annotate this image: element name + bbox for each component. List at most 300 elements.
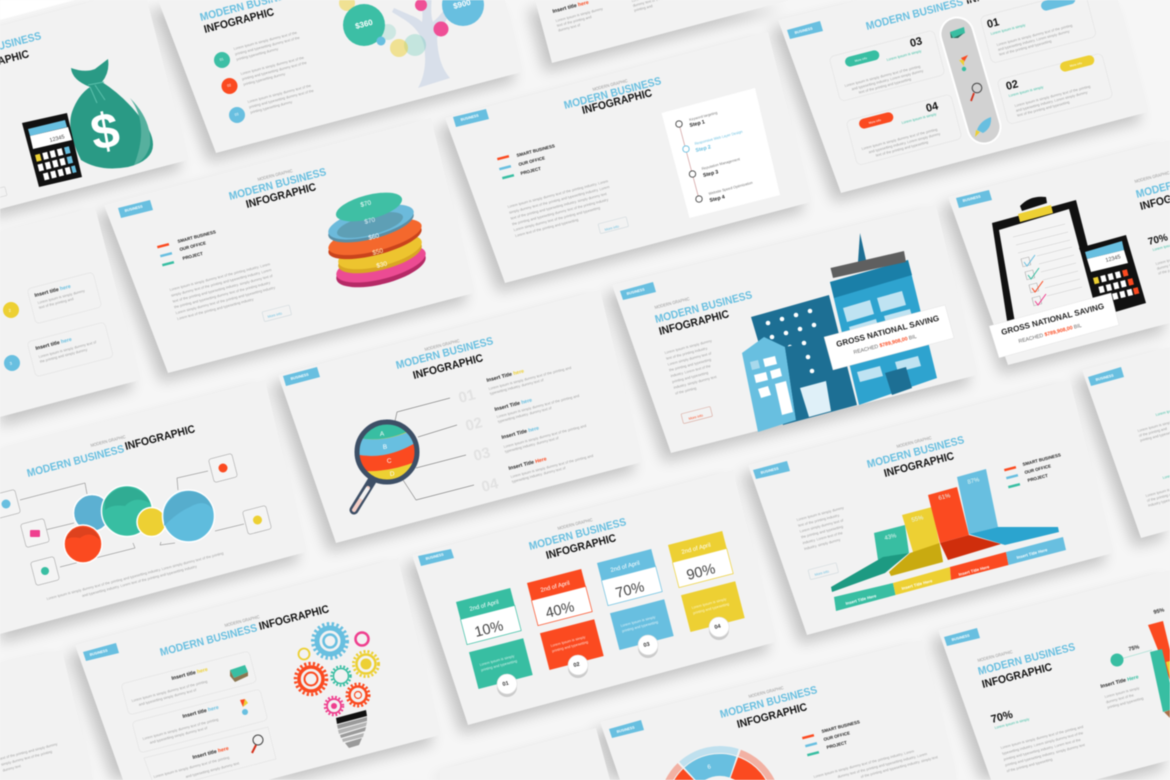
stat: 70%: Lorem Ipsum is simply <box>994 717 1030 730</box>
title: percent cards slide: MODERN GRAPHIC <box>557 517 593 531</box>
text: 70% <box>1147 232 1170 276</box>
card: steps: Keyword targeting <box>689 111 718 122</box>
paragraph: Lorem Ipsum is simply dummy text of the printing and <box>1000 725 1084 750</box>
numbers: 03 <box>472 444 492 465</box>
panel: money tree slide <box>158 0 522 153</box>
paragraph: Lorem Ipsum is simply dummy text of the printing and typesetting industry. Lorem simply dummy text of the printing <box>46 551 224 601</box>
card 04: 04 <box>925 100 940 115</box>
panel: bubbles slide <box>0 380 306 634</box>
list text: Lorem Ipsum is simply dummy text of the printing and <box>488 366 572 391</box>
list text: Insert Title here <box>486 368 525 384</box>
card 03 <box>829 30 945 102</box>
legend <box>497 143 555 179</box>
paragraph: the printing and typesetting <box>801 525 844 539</box>
chart: stacked discs: $70 <box>360 199 372 209</box>
button <box>681 406 713 424</box>
paragraph: of the printing <box>675 386 697 396</box>
icon: magnifier: C <box>387 458 392 465</box>
card: 40%: 02 <box>573 662 580 669</box>
list: numbered items: printing typesetting dummy <box>250 100 293 115</box>
panel: top middle slide <box>535 0 790 63</box>
title: gears slide: MODERN GRAPHIC <box>224 614 260 628</box>
legend: OUR OFFICE <box>823 730 851 742</box>
badge: BUSINESS <box>951 633 971 642</box>
stat: 70% <box>990 709 1030 730</box>
title: percent cards slide: MODERN BUSINESS <box>528 516 628 553</box>
card: 10% <box>456 588 533 697</box>
row: bulb: Insert title here <box>182 705 220 720</box>
badge: BUSINESS <box>1095 373 1115 382</box>
title: pill slide <box>865 0 1038 33</box>
callout: gross national saving: REACHED $789,908,00 BIL <box>853 334 917 356</box>
badge: BUSINESS <box>962 194 982 203</box>
card: steps: Reputation Management <box>701 157 740 171</box>
badge <box>944 628 980 646</box>
icon: money bag <box>70 59 153 168</box>
card 04: Lorem Ipsum is simply dummy text of the printing <box>861 128 938 151</box>
list: numbered items: Lorem Ipsum is simply dummy text of the <box>240 56 304 76</box>
title: ring chart slide: INFOGRAPHIC <box>736 701 809 731</box>
panel: ring chart slide <box>600 640 957 780</box>
card: 40%: 2nd of April <box>540 581 571 594</box>
icon: calculator <box>22 113 82 187</box>
card 01: Lorem Ipsum is simply dummy text of the printing <box>996 24 1073 47</box>
card: 90%: 2nd of April <box>681 543 712 556</box>
callout: gross national saving <box>989 293 1119 358</box>
paragraph: text of the printing industry. <box>798 513 840 528</box>
card 04: text of the printing and typesetting <box>875 140 929 158</box>
list text: typesetting industry. dummy text of <box>512 466 566 484</box>
title: bubbles slide: MODERN GRAPHIC <box>90 434 126 448</box>
badge: BUSINESS <box>124 204 144 213</box>
card 03: More info <box>854 56 868 63</box>
title: bubbles slide <box>26 423 197 480</box>
badge <box>418 549 454 566</box>
paragraph: Lorem simply dummy text of <box>799 518 844 534</box>
title: bubbles slide: MODERN BUSINESS <box>26 443 126 480</box>
icon: calculator <box>1079 235 1146 315</box>
legend: SMART BUSINESS <box>177 229 216 244</box>
numbers: 01 <box>457 386 477 407</box>
row: bulb <box>132 689 268 753</box>
paragraph: typesetting industry. Lorem simply dummy text of the <box>1002 731 1084 756</box>
panel: gears slide <box>75 558 440 780</box>
text blocks: of the printing and <box>1139 427 1167 438</box>
card: 90% <box>668 531 745 640</box>
badge <box>753 461 790 479</box>
card 01: Lorem Ipsum is simply <box>990 23 1026 36</box>
button <box>262 305 292 322</box>
card: 70%: Lorem Ipsum is simply <box>620 615 656 628</box>
paragraph: Lorem simply dummy text of the printing and typesetting industry <box>175 286 276 315</box>
card 02: and typesetting industry. Lorem simply dummy <box>1016 90 1088 113</box>
numbers <box>457 386 501 496</box>
title: gears slide: INFOGRAPHIC <box>258 603 331 633</box>
item box 2: text of the printing and <box>39 297 74 310</box>
card: 40% <box>527 569 604 678</box>
paragraph: and typesetting industry. Lorem text of the printing and typesetting industry <box>82 564 197 598</box>
callout: gross national saving: GROSS NATIONAL SAVING <box>1000 302 1105 337</box>
paragraph: printing and typesetting <box>672 371 709 384</box>
icons <box>2 464 262 575</box>
paragraph: Lorem Ipsum is simply dummy text of the printing industry. Lorem <box>813 749 915 779</box>
title: gears slide: MODERN BUSINESS <box>159 622 259 659</box>
text blocks <box>1137 408 1170 508</box>
chart: stepped bars: 43% <box>884 533 898 542</box>
callout: gross national saving: GROSS NATIONAL SAVING <box>835 314 940 349</box>
paragraph: Lorem Ipsum is simply dummy text of the printing industry. Lorem <box>507 179 609 209</box>
list: numbered items <box>214 30 316 123</box>
icon: tree: $360 <box>354 18 374 31</box>
row: magnifier: and typesetting simply dummy text <box>185 761 240 779</box>
legend: PROJECT <box>182 251 204 261</box>
card 01: and typesetting industry. Lorem simply dummy <box>998 29 1070 52</box>
stat: 70%: 70% <box>990 709 1014 726</box>
row: bulb: Lorem Ipsum is simply dummy text of the printing <box>142 718 219 741</box>
paragraph: Lorem simply dummy text of the printing and typesetting <box>513 206 601 232</box>
list: numbered items: printing and typesetting dummy text of the <box>242 61 307 81</box>
title: steps slide: MODERN GRAPHIC <box>592 78 628 92</box>
list text: Lorem Ipsum is simply dummy text of the printing and <box>503 424 587 449</box>
panel: right partial slide <box>1082 347 1170 538</box>
badge <box>83 643 119 661</box>
chart: partial bars <box>1110 607 1170 718</box>
chart: partial bars: 75% <box>1128 644 1140 653</box>
capsule with icons <box>950 27 991 137</box>
title: building slide <box>654 289 754 338</box>
panel: money bag slide <box>0 0 188 209</box>
panel: stepped bars slide <box>748 380 1113 635</box>
card 02: Lorem Ipsum is simply dummy text of the printing <box>1014 85 1091 108</box>
card 03: Lorem Ipsum is simply dummy text of the printing <box>844 65 921 88</box>
title: ring chart slide: MODERN BUSINESS <box>719 684 819 721</box>
card: steps: Step 3 <box>702 169 719 179</box>
numbers: 04 <box>480 475 501 496</box>
card 01: 01 <box>986 16 1001 31</box>
badge <box>1088 367 1124 386</box>
card 03: and typesetting industry. Lorem simply dummy <box>851 69 924 91</box>
panel: left partial slide <box>0 207 140 417</box>
paragraph: Lorem Ipsum is simply dummy text of the printing industry. Lorem <box>169 262 271 292</box>
badge <box>609 720 644 738</box>
list text: typesetting industry. dummy text of <box>498 406 552 424</box>
card: 70% <box>597 549 674 658</box>
card: steps <box>662 88 780 218</box>
icon: clipboard <box>992 197 1108 340</box>
card: 40%: Lorem Ipsum is simply <box>550 635 586 648</box>
title: stacked discs slide: MODERN GRAPHIC <box>257 168 293 182</box>
item box 3: Lorem Ipsum is simply dummy text of <box>38 340 97 359</box>
legend: SMART BUSINESS <box>1022 452 1061 467</box>
row: magnifier <box>144 727 276 780</box>
title: gears slide <box>159 603 331 659</box>
numbers: 02 <box>464 414 484 435</box>
icon: money bag: $ <box>86 101 124 161</box>
chart: partial bars: 95% <box>1153 607 1165 616</box>
list: numbered items: printing typesetting dummy <box>236 47 279 62</box>
paragraph: the printing and typesetting <box>669 358 712 372</box>
panel: building slide <box>612 205 977 453</box>
text block: insert title: Insert Title Here <box>1100 674 1139 690</box>
paragraph: the printing and typesetting dummy text of the printing industry <box>512 198 609 226</box>
row: magnifier: Insert title here <box>192 746 230 761</box>
card: steps: Responsive Web Layer Design <box>694 130 743 146</box>
item box 2: 2 <box>8 307 12 313</box>
card: 70%: 03 <box>643 642 650 649</box>
paragraph: Lorem simply dummy text of <box>667 351 712 367</box>
card: steps: Step 4 <box>709 194 726 204</box>
title: magnifier slide: INFOGRAPHIC <box>412 352 485 382</box>
illustration: buildings <box>742 233 937 432</box>
chart: ring <box>665 746 775 780</box>
icon: calculator: 12345 <box>49 134 65 144</box>
title: magnifier slide: MODERN BUSINESS <box>395 335 495 372</box>
title: money tree slide: INFOGRAPHIC <box>203 6 276 36</box>
paragraph: Lorem Ipsum is simply dummy <box>796 506 844 522</box>
legend: OUR OFFICE <box>518 155 546 167</box>
title: steps slide: MODERN BUSINESS <box>563 75 663 112</box>
title: stacked discs slide: INFOGRAPHIC <box>245 181 318 211</box>
card 02: More info <box>1069 61 1083 68</box>
paragraph: industry. Lorem text of the <box>670 364 711 378</box>
list text: Insert Title Here <box>508 456 547 472</box>
legend: OUR OFFICE <box>179 240 207 252</box>
legend: PROJECT <box>826 740 848 750</box>
item box 3 <box>4 322 113 377</box>
row: magnifier: Lorem Ipsum is simply dummy text of the printing <box>153 756 230 779</box>
legend: SMART BUSINESS <box>516 143 555 158</box>
list: numbered items: 01 <box>219 57 224 62</box>
paragraph: text of the printing industry. <box>666 346 708 361</box>
button: More info <box>814 569 829 577</box>
panel: magnifier slide <box>278 290 642 543</box>
badge: BUSINESS <box>425 552 445 561</box>
card: 90%: 90% <box>685 561 717 584</box>
paragraph: printing and typesetting industry. Lorem text of the <box>1003 738 1081 762</box>
card 04: More info <box>868 118 882 125</box>
title: bar chart slide: MODERN GRAPHIC <box>977 649 1013 663</box>
card: 10%: 2nd of April <box>469 600 500 613</box>
paragraph: dummy text of the printing and typesetting industry. Lorem <box>837 752 928 779</box>
card 03: text of the printing and typesetting <box>858 77 912 95</box>
paragraph: industry. simply dummy text <box>673 375 717 390</box>
title: bar chart slide <box>977 641 1077 691</box>
text block: insert title: dummy text of <box>558 23 581 33</box>
title: bar chart slide: INFOGRAPHIC <box>981 661 1054 691</box>
callout: gross national saving <box>824 305 954 370</box>
text block: insert title: Insert title here <box>552 0 590 15</box>
title: bubbles slide: INFOGRAPHIC <box>124 423 197 453</box>
list: numbered items: Lorem Ipsum is simply dummy text of the <box>233 31 297 51</box>
button <box>0 187 7 199</box>
chart: stepped bars: Insert Title Here <box>1016 547 1048 560</box>
card 04 <box>846 94 962 166</box>
paragraph: simply dummy text of the printing <box>1 750 53 767</box>
paragraph: text of the printing and typesetting industry. simply dummy text of <box>172 274 273 304</box>
icon: calculator: 12345 <box>1105 254 1121 264</box>
list: numbered items: printing typesetting dummy <box>243 72 286 87</box>
paragraph: simply dummy text of the printing and typesetting industry. Lorem <box>171 268 272 298</box>
chart: stepped bars: Insert Title Here <box>845 593 877 606</box>
button: More info <box>604 224 619 232</box>
chart: stepped bars: Insert Title Here <box>901 578 933 591</box>
card 02: Lorem Ipsum is simply <box>1008 85 1044 98</box>
list text: Lorem Ipsum is simply dummy text of the printing and <box>496 394 580 419</box>
leader lines <box>395 398 474 500</box>
card 02 <box>997 53 1113 125</box>
panel: percent cards slide <box>412 470 776 725</box>
card: 90%: Lorem Ipsum is simply <box>691 597 727 610</box>
list text: Insert Title here <box>494 397 533 413</box>
card 04: and typesetting industry. Lorem simply dummy <box>868 132 941 154</box>
button <box>808 563 839 580</box>
title: stepped bars slide: MODERN GRAPHIC <box>896 435 932 449</box>
panel: pill slide <box>778 0 1148 193</box>
item box 3: Insert title here <box>35 337 73 352</box>
chart: stepped bars: 87% <box>967 477 981 486</box>
badge <box>787 21 823 39</box>
list text: Lorem Ipsum is simply dummy text of the printing and <box>510 454 594 479</box>
list: numbered items: 02 <box>227 83 232 88</box>
card 04: Lorem Ipsum is simply <box>901 112 937 125</box>
title: money tree slide <box>199 0 299 36</box>
card 03: Lorem Ipsum is simply <box>886 49 922 62</box>
legend <box>1004 452 1061 488</box>
card 02: text of the printing and typesetting <box>1017 100 1070 118</box>
row: book: and typesetting simply dummy text of <box>138 688 197 707</box>
chart: stepped bars: Insert Title Here <box>958 564 990 577</box>
title: building slide: MODERN GRAPHIC <box>654 296 690 310</box>
paragraph: Lorem Ipsum is simply dummy <box>664 339 712 355</box>
badge: BUSINESS <box>794 26 814 35</box>
paragraph: text of the printing and typesetting industry. simply dummy text <box>510 192 607 221</box>
badge: BUSINESS <box>760 466 780 475</box>
card: 90%: 04 <box>714 623 722 631</box>
button <box>598 217 629 234</box>
title: stacked discs slide: MODERN BUSINESS <box>228 166 328 203</box>
button: More info <box>688 413 703 421</box>
text block: insert title: printing and <box>634 4 653 13</box>
card: 40%: 40% <box>544 599 576 622</box>
list: numbered items: 03 <box>234 112 239 117</box>
title: stepped bars slide: INFOGRAPHIC <box>883 450 956 480</box>
icon: magnifier <box>350 418 420 510</box>
icon: tree <box>339 0 484 88</box>
panel: bar chart slide right <box>938 570 1170 780</box>
panel: stacked discs slide <box>104 118 474 373</box>
row: bulb: and typesetting simply dummy text of <box>149 726 208 745</box>
list text <box>486 366 595 484</box>
card 01: text of the printing and typesetting <box>999 39 1052 57</box>
card: 70%: printing and typesetting <box>622 620 659 633</box>
chart: stacked discs: $30 <box>376 260 388 270</box>
item box 2: Lorem Ipsum is simply dummy <box>37 289 85 305</box>
paragraph: dummy text <box>2 764 21 773</box>
panel: bottom left partial slide <box>0 650 93 780</box>
card: 10%: 10% <box>473 618 505 641</box>
paragraph: Lorem text of the printing and typesetting <box>515 218 579 238</box>
chart: stepped bars <box>831 469 1066 611</box>
list: numbered items: printing and typesetting dummy text of the <box>249 89 314 109</box>
card: 10%: printing and typesetting <box>481 659 518 672</box>
text block: insert title: text of the printing and <box>557 15 592 28</box>
paragraph: the printing and typesetting dummy text of the printing industry <box>174 281 271 309</box>
paragraph: of the printing and typesetting <box>1006 758 1053 773</box>
card: 40%: printing and typesetting <box>552 640 589 653</box>
illustration: gear bulb <box>296 624 378 715</box>
list: numbered items: printing and typesetting dummy text of the <box>235 36 300 56</box>
title: steps slide: INFOGRAPHIC <box>581 87 654 117</box>
title: money bag slide <box>0 30 43 78</box>
row: book <box>121 651 257 715</box>
badge <box>118 200 153 218</box>
text block: insert title <box>1100 674 1144 710</box>
card: steps: Step 2 <box>695 144 712 154</box>
callout: gross national saving: REACHED $789,908,00 BIL <box>1018 323 1082 345</box>
leader lines <box>20 471 244 567</box>
item box 2: Insert title here <box>34 284 72 299</box>
legend: OUR OFFICE <box>1024 463 1052 475</box>
row: book: Lorem Ipsum is simply dummy text of the printing <box>131 680 208 703</box>
text: 70%: 70% <box>1147 232 1169 248</box>
list: numbered items: Lorem Ipsum is simply dummy text of the <box>247 84 311 104</box>
chart: stacked discs: $60 <box>368 232 380 242</box>
legend: PROJECT <box>1027 473 1049 483</box>
legend: SMART BUSINESS <box>821 719 860 734</box>
title: bar chart slide: MODERN BUSINESS <box>977 641 1077 678</box>
badge <box>620 282 656 300</box>
paragraph: text of the printing and simply dummy <box>0 742 58 761</box>
title: stepped bars slide: MODERN BUSINESS <box>866 434 966 471</box>
title: building slide: INFOGRAPHIC <box>658 308 731 338</box>
panel: bottom centre blank slide <box>440 728 610 780</box>
panel: clipboard slide <box>948 140 1170 365</box>
legend: PROJECT <box>520 166 542 176</box>
chart: stepped bars: 55% <box>911 515 925 524</box>
list text: typesetting industry. dummy text of <box>490 378 544 396</box>
paragraph: Lorem text of the printing and typesetting industry <box>177 297 254 321</box>
card: 70%: 2nd of April <box>610 561 641 574</box>
icon boxes <box>0 453 272 586</box>
badge: BUSINESS <box>290 372 310 381</box>
item box 3: 3 <box>9 360 13 366</box>
text block: insert title <box>552 0 675 33</box>
badge: BUSINESS <box>626 287 646 296</box>
text block: insert title: Lorem Ipsum is simply <box>1104 686 1140 699</box>
card: 90%: printing and typesetting <box>693 602 730 615</box>
panel: steps slide <box>445 32 811 283</box>
card: steps: Website Speed Optimization <box>708 181 753 196</box>
chart: stacked discs: $70 <box>364 216 376 226</box>
bubble shading <box>66 487 213 540</box>
paragraph: printing and typesetting industry. simply dummy text <box>1005 743 1085 767</box>
title: ring chart slide: MODERN GRAPHIC <box>748 685 784 699</box>
list text: typesetting industry. dummy text of <box>505 436 559 454</box>
card: 10%: Lorem Ipsum is simply <box>479 654 515 667</box>
card: 70%: 70% <box>614 579 646 602</box>
paragraph: industry. simply dummy <box>804 538 841 551</box>
title: building slide: MODERN BUSINESS <box>654 289 754 326</box>
chart: bubbles <box>64 486 214 563</box>
paragraph: simply dummy text of the printing and typesetting industry. Lorem <box>509 185 610 215</box>
text block: insert title: printing and typesetting <box>1107 696 1144 710</box>
text block: insert title: dummy text of the <box>1106 693 1134 704</box>
badge: BUSINESS <box>460 113 480 122</box>
badge <box>283 367 320 386</box>
card 02: 02 <box>1005 78 1020 93</box>
icon: magnifier: D <box>390 471 395 478</box>
chart: stacked discs: $50 <box>372 247 384 257</box>
